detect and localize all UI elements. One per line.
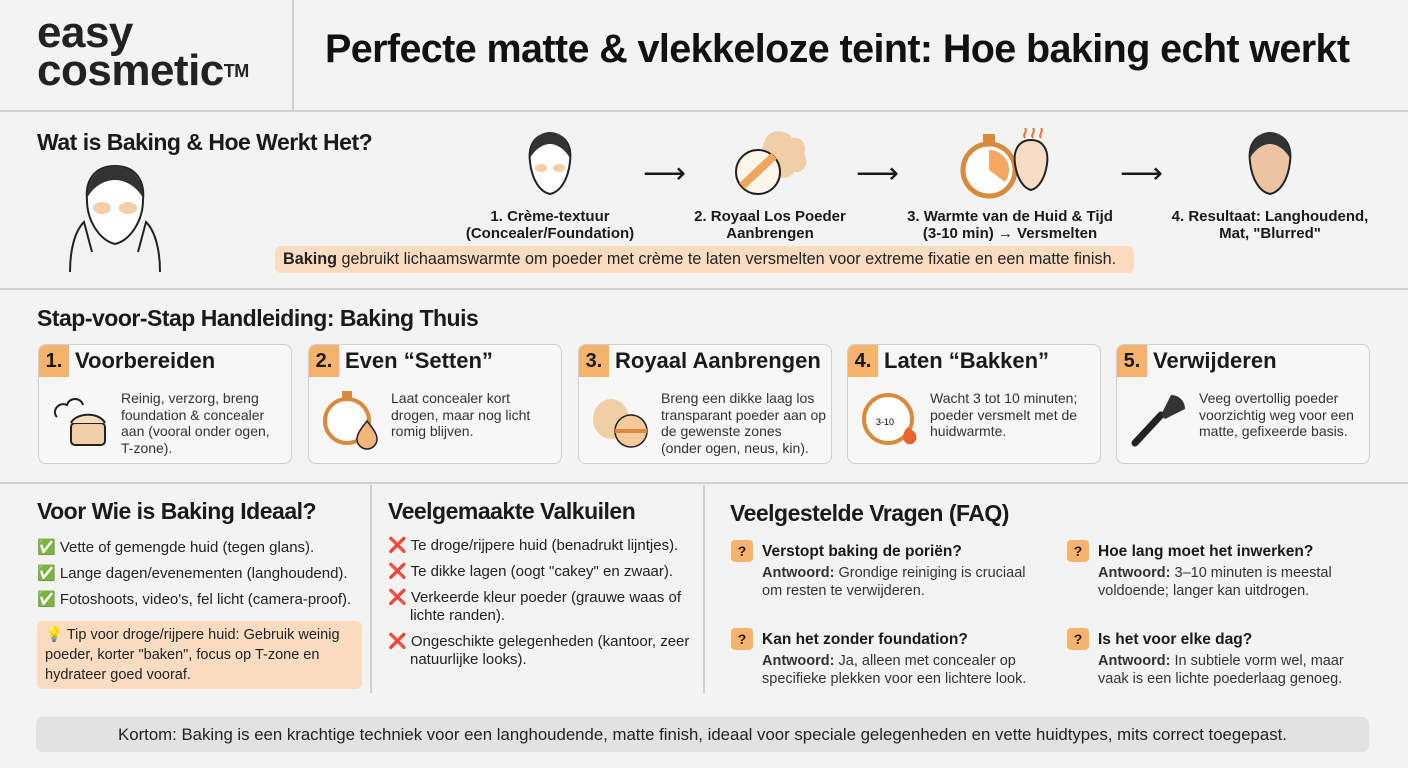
arrow: ⟶ [856, 157, 899, 190]
card 2: drogen, maar nog licht [391, 406, 530, 422]
faq 2 [1067, 540, 1332, 599]
faq 2: Antwoord: 3–10 minuten is meestal voldoende; langer kan uitdrogen. [1098, 565, 1332, 599]
faq 1: ? [738, 543, 746, 559]
list: valkuilen: ❌ Verkeerde kleur poeder (grauwe waas of lichte randen). [388, 589, 681, 624]
footer summary: Kortom: Baking is een krachtige techniek voor een langhoudende, matte finish, ideaal voor speciale gelegenheden en vette huidtypes, mits correct toegepast. [118, 725, 1287, 744]
column: voor wie: Voor Wie is Baking Ideaal? [37, 498, 316, 524]
logo: cosmeticTM [37, 46, 249, 95]
card 4 [847, 344, 1101, 464]
card 3: de gewenste zones [661, 423, 782, 439]
card 1: aan (vooral onder ogen, [121, 423, 270, 439]
faq 3: ? [738, 631, 746, 647]
card 5: Verwijderen [1153, 348, 1277, 373]
card 1: Voorbereiden [75, 348, 215, 373]
arrow: ⟶ [643, 157, 686, 190]
card 4: Wacht 3 tot 10 minuten; [930, 390, 1077, 406]
card 5: matte, gefixeerde basis. [1199, 423, 1348, 439]
card 2: Even “Setten” [345, 348, 493, 373]
tip callout: 💡 Tip voor droge/rijpere huid: Gebruik weinig poeder, korter "baken", focus op T-zone en hydrateer goed vooraf. [45, 627, 340, 683]
card 1: Reinig, verzorg, breng [121, 390, 259, 406]
column: valkuilen: Veelgemaakte Valkuilen [388, 498, 635, 524]
faq 1: Antwoord: Grondige reiniging is cruciaal om resten te verwijderen. [762, 565, 1026, 599]
card 3: 3. [586, 350, 602, 372]
step 3: 3. Warmte van de Huid & Tijd [907, 208, 1113, 225]
list: ideaal [37, 538, 351, 608]
faq 4: ? [1074, 631, 1082, 647]
card 1: foundation & concealer [121, 406, 264, 422]
card 1 [38, 344, 292, 464]
list: valkuilen: ❌ Te droge/rijpere huid (benadrukt lijntjes). [388, 537, 678, 554]
step 2 [694, 131, 846, 242]
list: valkuilen: ❌ Ongeschikte gelegenheden (kantoor, zeer natuurlijke looks). [388, 633, 689, 668]
card 4: huidwarmte. [930, 423, 1006, 439]
step 3: (3-10 min) → Versmelten [923, 225, 1097, 242]
icon: face with hands [69, 165, 161, 272]
list: ideaal: ✅ Lange dagen/evenementen (langhoudend). [37, 565, 348, 582]
faq 4: Antwoord: In subtiele vorm wel, maar vaak is een lichte poederlaag genoeg. [1098, 653, 1344, 687]
card 1: T-zone). [121, 440, 172, 456]
section: wat is baking [37, 128, 1368, 273]
card 5: voorzichtig weg voor een [1199, 406, 1354, 422]
card 4: 4. [855, 350, 871, 372]
heading: faq: Veelgestelde Vragen (FAQ) [730, 500, 1009, 526]
column: valkuilen [388, 498, 690, 668]
heading: stap voor stap: Stap-voor-Stap Handleiding: Baking Thuis [37, 305, 478, 331]
card 1: 1. [46, 350, 62, 372]
card 4: Laten “Bakken” [884, 348, 1049, 373]
logo [37, 8, 249, 95]
step 4: 4. Resultaat: Langhoudend, [1172, 208, 1368, 225]
card 2: romig blijven. [391, 423, 473, 439]
card 3: (onder ogen, neus, kin). [661, 440, 809, 456]
callout: Baking gebruikt lichaamswarmte om poeder met crème te laten versmelten voor extreme fixatie en een matte finish. [283, 250, 1116, 268]
step 4: Mat, "Blurred" [1219, 225, 1321, 242]
card 2: 2. [316, 350, 332, 372]
card 4: poeder versmelt met de [930, 406, 1077, 422]
step 2: 2. Royaal Los Poeder [694, 208, 846, 225]
card 2 [308, 344, 562, 464]
arrow: ⟶ [1120, 157, 1163, 190]
faq 4 [1067, 628, 1344, 687]
faq 3: Kan het zonder foundation? [762, 631, 968, 648]
card 5 [1116, 344, 1370, 464]
card 2: Laat concealer kort [391, 390, 510, 406]
step 4 [1172, 132, 1368, 242]
footer summary [36, 717, 1369, 752]
faq 2: ? [1074, 543, 1082, 559]
faq 4: Is het voor elke dag? [1098, 631, 1252, 648]
step 1 [466, 132, 634, 242]
callout [275, 246, 1134, 273]
list: ideaal: ✅ Vette of gemengde huid (tegen glans). [37, 539, 314, 556]
list: valkuilen [388, 536, 690, 668]
column: voor wie [37, 498, 362, 689]
logo: easy [37, 8, 133, 57]
card 3 [578, 344, 832, 464]
faq 1 [731, 540, 1026, 599]
card 3: transparant poeder aan op [661, 406, 826, 422]
step 1: 1. Crème-textuur [490, 208, 610, 225]
faq 3 [731, 628, 1026, 687]
card 3: Breng een dikke laag los [661, 390, 814, 406]
faq 1: Verstopt baking de poriën? [762, 543, 962, 560]
step 1: (Concealer/Foundation) [466, 225, 634, 242]
faq 2: Hoe lang moet het inwerken? [1098, 543, 1313, 560]
card 4: 3-10 [876, 417, 894, 427]
card 5: Veeg overtollig poeder [1199, 390, 1338, 406]
card 3: Royaal Aanbrengen [615, 348, 821, 373]
list: ideaal: ✅ Fotoshoots, video's, fel licht (camera-proof). [37, 591, 351, 608]
faq 3: Antwoord: Ja, alleen met concealer op specifieke plekken voor een lichtere look. [762, 653, 1026, 687]
title: Perfecte matte & vlekkeloze teint: Hoe baking echt werkt [325, 27, 1349, 71]
card 5: 5. [1124, 350, 1140, 372]
list: valkuilen: ❌ Te dikke lagen (oogt "cakey" en zwaar). [388, 563, 673, 580]
step 3 [907, 128, 1113, 242]
heading: wat is baking: Wat is Baking & Hoe Werkt Het? [37, 129, 372, 155]
step 2: Aanbrengen [726, 225, 814, 242]
